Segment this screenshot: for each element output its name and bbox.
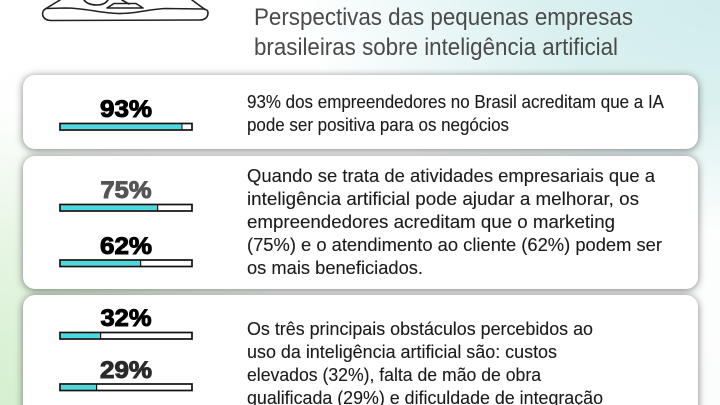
text: card 3: elevados (32%), falta de mão de obra (247, 365, 542, 385)
text: card 3 (247, 319, 603, 405)
text: card 3: uso da inteligência artificial são: custos (247, 342, 557, 362)
text: card 2: os mais beneficiados. (247, 258, 423, 278)
stat: 29% (60, 357, 192, 390)
stat: 93% (60, 96, 192, 130)
icon: laptop with hands (43, 0, 208, 20)
stat: 32%: 32% (100, 305, 152, 332)
panel: card obstacles (23, 295, 698, 405)
heading: Perspectivas das pequenas empresas (254, 4, 633, 31)
panel: card 93% (23, 75, 698, 149)
stat: 75% (60, 177, 192, 211)
stat: 75%: 75% (100, 177, 152, 204)
stat: 32% (60, 305, 192, 339)
stat: 29%: 29% (100, 357, 152, 384)
text: card 3: Os três principais obstáculos percebidos ao (247, 319, 593, 339)
heading (254, 4, 633, 61)
text: card 2: (75%) e o atendimento ao cliente (62%) podem ser (247, 235, 662, 255)
text: card 1: 93% dos empreendedores no Brasil acreditam que a IA (247, 92, 664, 112)
text: card 1: pode ser positiva para os negócios (247, 115, 509, 135)
text: card 1 (247, 92, 664, 135)
stat: 62% (60, 233, 192, 266)
text: card 2: inteligência artificial pode ajudar a melhorar, os (247, 189, 639, 209)
stat: 93%: 93% (100, 96, 152, 123)
stat: 62%: 62% (100, 233, 152, 260)
text: card 2: Quando se trata de atividades empresariais que a (247, 166, 656, 186)
text: card 2: empreendedores acreditam que o marketing (247, 212, 615, 232)
heading: brasileiras sobre inteligência artificial (254, 34, 618, 61)
text: card 2 (247, 166, 662, 278)
panel: card marketing and customer service (23, 156, 698, 289)
